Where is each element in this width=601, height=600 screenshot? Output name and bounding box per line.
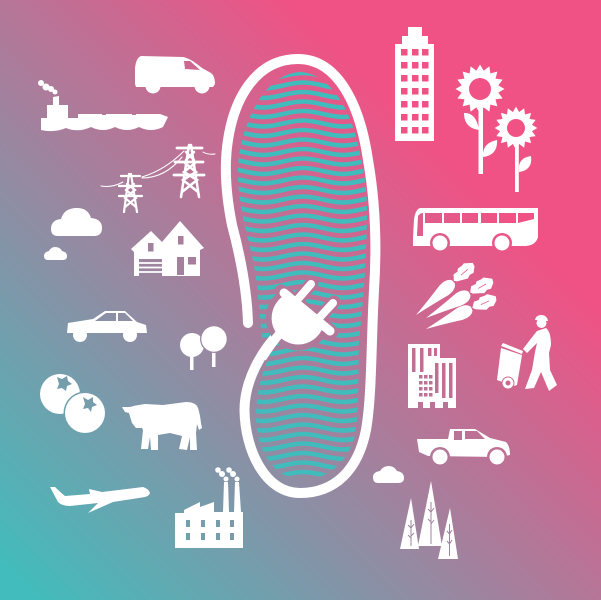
wavy tread lines: [238, 72, 368, 476]
footprint insole with plug: [220, 54, 380, 498]
plug clearing halo: [272, 291, 332, 344]
icon: sunflowers: [455, 64, 537, 192]
small pylon: [124, 174, 137, 212]
plug: [272, 284, 333, 344]
icon: carrots: [411, 259, 499, 335]
icon: bus: [413, 208, 538, 253]
icon: cloud near pines: [373, 466, 404, 483]
icon: blueberries: [40, 374, 106, 434]
bin: [497, 343, 523, 390]
icon: large cloud: [51, 208, 102, 236]
icon: airplane: [50, 487, 150, 513]
icon: small cloud: [44, 247, 67, 260]
sunflower right: [495, 107, 537, 192]
icon: skyscraper: [395, 27, 434, 141]
icon: cargo ship: [38, 80, 168, 131]
large pylon: [181, 145, 199, 197]
icon: van: [135, 56, 215, 94]
power lines: [101, 151, 215, 186]
icon: factory: [175, 467, 243, 548]
icon: power pylons: [101, 145, 215, 212]
cord over halo: [262, 331, 282, 358]
icon: worker with wheelie bin: [497, 315, 557, 391]
icon: trees: [180, 325, 228, 370]
icon: car: [67, 311, 147, 342]
icon: office buildings: [408, 344, 456, 408]
insole outline and cord: [226, 59, 375, 493]
worker: [523, 315, 557, 391]
icon: pine trees: [400, 481, 458, 559]
icon: house: [131, 221, 204, 276]
sunflower left: [455, 64, 505, 174]
icon: pickup truck: [417, 429, 510, 467]
icon: cow: [122, 402, 202, 450]
prong clearing halo: [300, 283, 334, 315]
